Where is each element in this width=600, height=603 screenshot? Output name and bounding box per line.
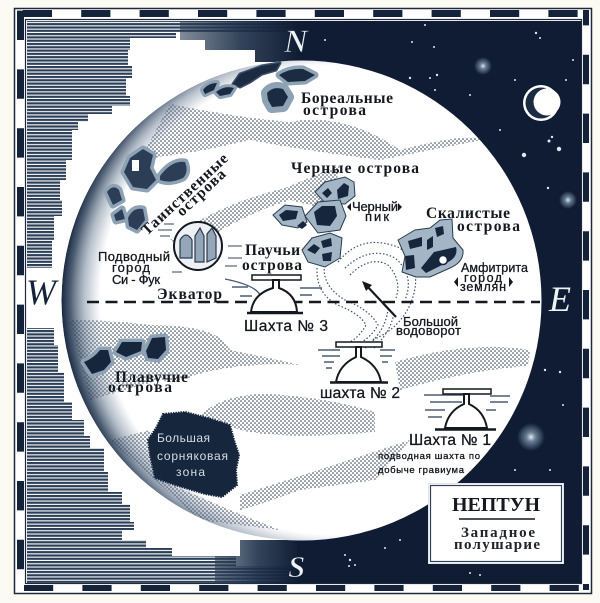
compass: east: E [548, 279, 571, 319]
arrow: whirlpool pointer [362, 281, 396, 317]
label: boreal islands: Бореальные [301, 90, 393, 107]
weed zone [148, 412, 239, 497]
islands: rocky [398, 219, 463, 277]
label: great whirlpool [396, 314, 461, 338]
stars [324, 24, 577, 576]
label: Amphitrite: Амфитрита [461, 261, 528, 275]
label: boreal islands: острова [303, 102, 366, 119]
label: mine note: добыче гравиума [378, 465, 465, 476]
label: spider islands: Паучьи [245, 242, 300, 259]
planet disc [62, 60, 542, 540]
label: floating islands [108, 369, 188, 396]
subtitle: west hemisphere: полушарие [454, 537, 540, 553]
label: rocky islands: острова [457, 218, 520, 235]
label: great whirlpool: водоворот [396, 323, 461, 338]
label: Amphitrite: землян [460, 280, 506, 294]
label: Amphitrite: город [464, 271, 503, 285]
label: floating islands: острова [108, 379, 172, 396]
label: boreal islands [301, 90, 393, 119]
label: floating islands: Плавучие [115, 369, 188, 386]
label: equator: Экватор [157, 286, 222, 303]
label: Amphitrite [454, 261, 528, 294]
label: rocky islands [426, 205, 520, 235]
icon: mine 1 [424, 389, 510, 430]
label: mysterious islands: Таинственные [138, 150, 232, 239]
label: undersea city: Си - Фук [112, 272, 160, 287]
label: undersea city: Подводный [98, 249, 170, 264]
label: weed zone: Большая [157, 431, 210, 445]
label: black peak [347, 199, 402, 224]
label: mine 3: Шахта № 3 [244, 318, 328, 335]
compass: north: N [283, 24, 309, 60]
moon [523, 85, 560, 121]
islands: floating [84, 337, 166, 374]
lost city marker [132, 160, 139, 171]
icon: mine 2 [318, 342, 395, 382]
islands: black [273, 177, 355, 267]
label: mine 2: шахта № 2 [320, 385, 400, 402]
label: great whirlpool: Большой [403, 314, 458, 329]
subtitle: west hemisphere: Западное [461, 525, 535, 541]
label: weed zone: зона [176, 465, 205, 479]
title box [428, 484, 564, 564]
compass: west: W [26, 272, 59, 312]
islands: boreal [203, 63, 315, 107]
label: weed zone: сорняковая [157, 449, 228, 463]
icon: undersea city dome [158, 222, 242, 272]
label: black peak: Черный [352, 199, 398, 214]
label: spider islands [242, 242, 302, 274]
stippled ocean bands [70, 104, 530, 530]
label: spider islands: острова [242, 257, 302, 274]
label: mine note [378, 451, 480, 476]
icon: mine 3 [225, 275, 322, 313]
label: black peak: пик [365, 209, 389, 224]
label: mine 1: Шахта № 1 [409, 432, 491, 449]
label: mysterious islands: острова [173, 166, 230, 220]
title: НЕПТУН [452, 494, 540, 516]
label: black islands: Черные острова [291, 160, 419, 177]
label: undersea city [98, 249, 170, 287]
dashed equator [87, 301, 540, 303]
label: mine note: подводная шахта по [378, 451, 480, 462]
islands: mysterious [107, 149, 187, 230]
label: undersea city: город [112, 260, 150, 275]
spiral: great whirlpool [317, 242, 416, 348]
label: rocky islands: Скалистые [426, 205, 510, 222]
compass: south: S [288, 549, 305, 584]
label: weed zone [157, 431, 228, 479]
